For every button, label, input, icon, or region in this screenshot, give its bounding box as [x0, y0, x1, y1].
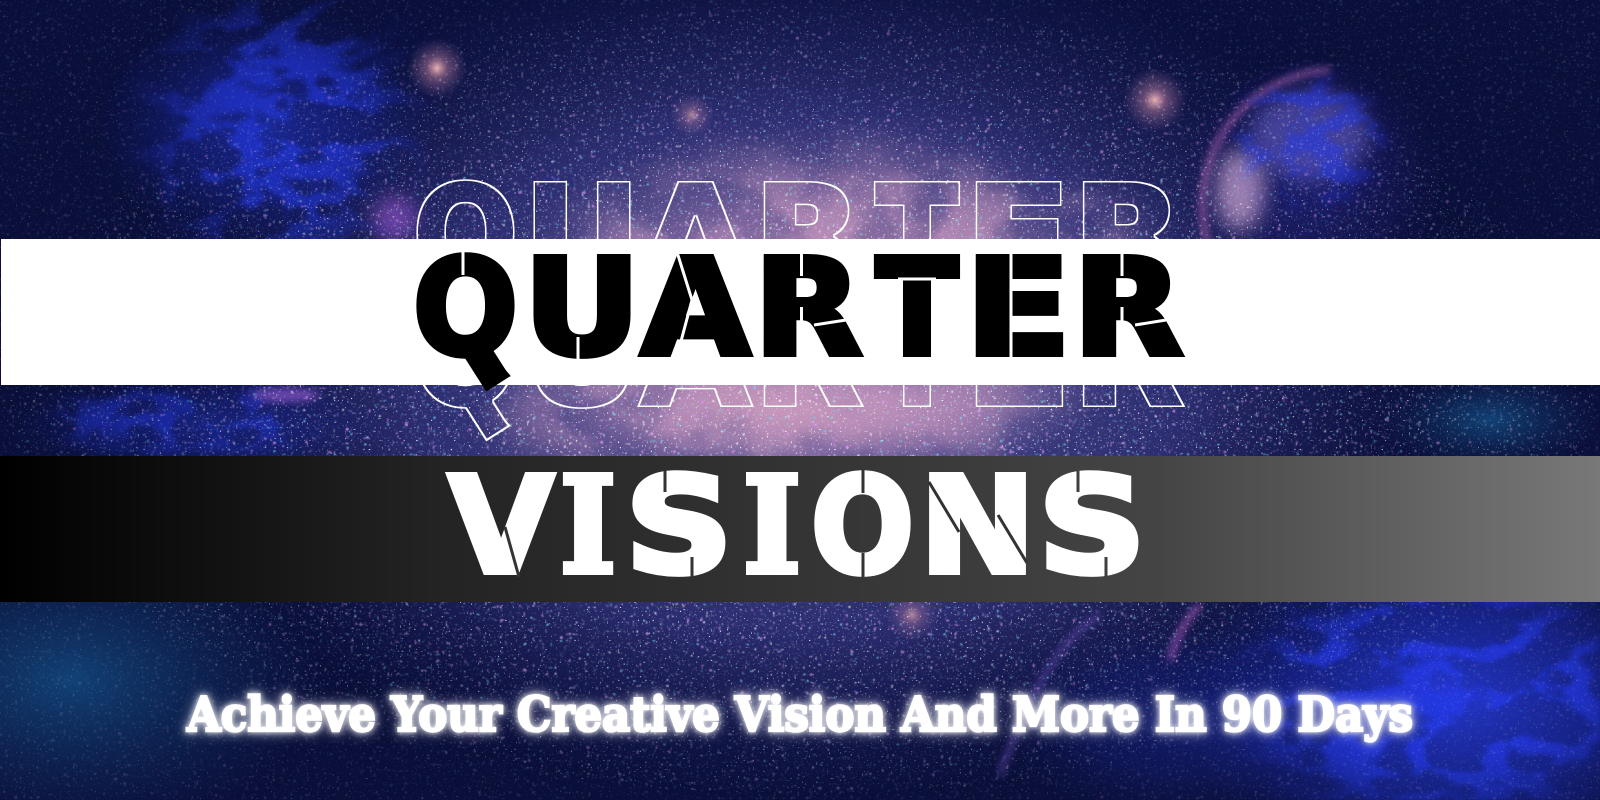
title word: QUARTER: R	[754, 232, 862, 386]
title word: VISIONS: N	[920, 450, 1036, 604]
outlined QUARTER echo below the band: U	[524, 282, 640, 436]
title word: QUARTER: U	[524, 232, 640, 386]
title word: VISIONS: I	[560, 448, 616, 604]
title word: VISIONS: S	[1038, 450, 1146, 604]
title word: QUARTER: E	[965, 232, 1071, 386]
title word: VISIONS	[449, 448, 1146, 604]
title word: VISIONS: I	[743, 448, 801, 604]
white band	[1, 239, 1600, 385]
title word: QUARTER: T	[876, 232, 958, 386]
outlined QUARTER echo below the band: Q	[413, 282, 518, 436]
title word: VISIONS: S	[625, 450, 733, 604]
outlined QUARTER echo above the band: Q	[413, 159, 518, 313]
title word: QUARTER: A	[641, 232, 750, 386]
outlined QUARTER echo below the band: R	[754, 282, 862, 436]
outlined QUARTER echo above the band	[413, 159, 1183, 313]
outlined QUARTER echo above the band: R	[1073, 159, 1183, 313]
tagline with white glow: Achieve Your Creative Vision And More In 90 Days	[186, 687, 1413, 743]
title word: QUARTER	[413, 232, 1183, 386]
outlined QUARTER echo above the band: A	[641, 159, 750, 313]
outlined QUARTER echo below the band: E	[965, 282, 1071, 436]
outlined QUARTER echo below the band	[413, 282, 1183, 436]
outlined QUARTER echo above the band: R	[754, 159, 862, 313]
title word: QUARTER: Q	[413, 232, 518, 386]
outlined QUARTER echo below the band: T	[876, 282, 958, 436]
outlined QUARTER echo above the band: U	[524, 159, 640, 313]
title word: VISIONS: V	[449, 450, 554, 604]
title word: QUARTER: R	[1073, 232, 1183, 386]
dark gradient band	[0, 456, 1600, 602]
outlined QUARTER echo below the band: A	[641, 282, 750, 436]
outlined QUARTER echo below the band: R	[1073, 282, 1183, 436]
title word: VISIONS: O	[811, 450, 914, 604]
outlined QUARTER echo above the band: E	[965, 159, 1071, 313]
outlined QUARTER echo above the band: T	[876, 159, 958, 313]
